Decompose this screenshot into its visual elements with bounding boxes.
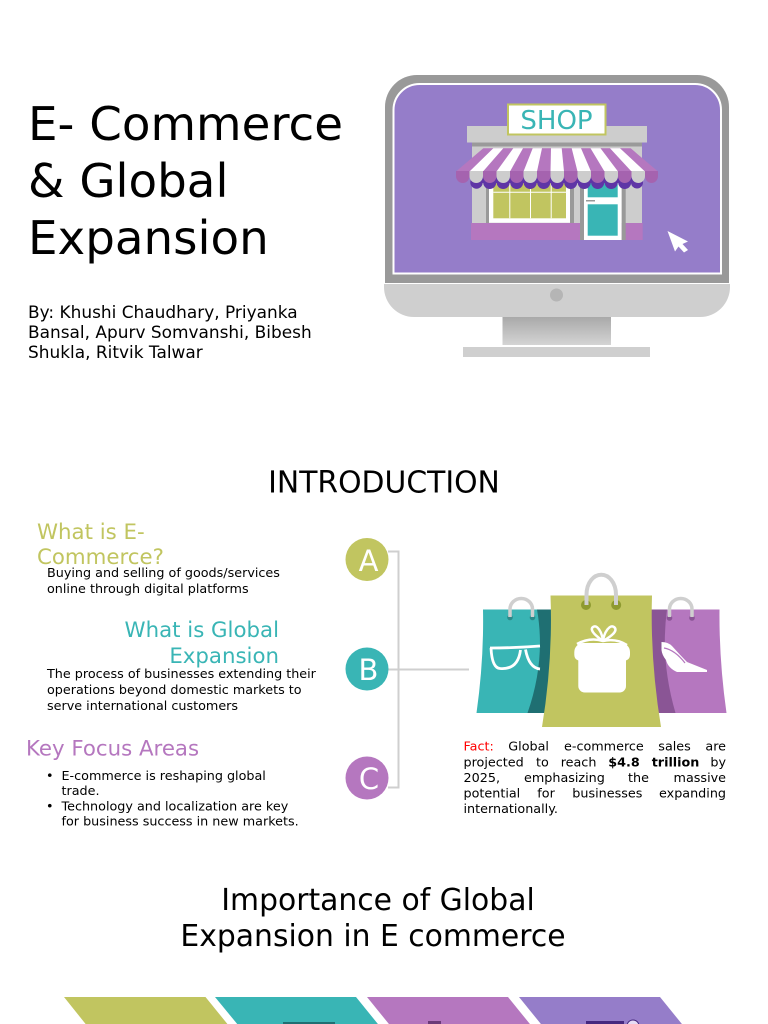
icon: cursor	[668, 231, 688, 252]
icon: shopping bags	[476, 575, 726, 727]
fact callout: massive	[674, 771, 726, 786]
purple bag	[650, 598, 726, 713]
bullet list: E-commerce is reshaping global	[62, 769, 266, 784]
body text	[46, 667, 317, 714]
subheading: What is E-	[37, 520, 145, 545]
badge A	[346, 538, 388, 581]
monitor stand	[502, 317, 611, 345]
screen	[394, 84, 721, 274]
green bag	[542, 575, 661, 727]
fact callout: businesses	[572, 786, 643, 802]
block: key focus areas	[26, 736, 299, 830]
fact callout: to	[536, 756, 549, 770]
bullet list: •	[46, 800, 54, 814]
subheading: What is Global	[125, 618, 279, 643]
subheading: Expansion	[169, 644, 279, 669]
fact callout	[464, 740, 726, 817]
fact callout: e-commerce	[564, 740, 644, 754]
body text: online through digital platforms	[47, 582, 249, 597]
bullet list: for business success in new markets.	[62, 815, 299, 830]
connector bracket	[388, 552, 469, 788]
title	[28, 98, 343, 266]
subheading: Commerce?	[37, 545, 164, 570]
awning	[456, 148, 658, 189]
shop roof	[467, 126, 647, 142]
fact callout: sales	[658, 740, 691, 754]
fact callout: Fact:	[464, 740, 494, 754]
teal bag	[476, 598, 552, 713]
bullet list	[46, 769, 299, 830]
monitor button	[550, 288, 563, 302]
fact callout: $4.8	[608, 756, 640, 770]
subheading: Key Focus Areas	[26, 736, 199, 762]
body text: operations beyond domestic markets to	[47, 683, 302, 698]
subheading	[125, 618, 279, 669]
title: Expansion	[28, 212, 269, 266]
chevron violet	[519, 997, 696, 1024]
fact callout: trillion	[652, 756, 699, 770]
fact callout: the	[628, 771, 649, 786]
monitor chin	[384, 284, 730, 317]
subheading	[37, 520, 164, 570]
body text	[47, 566, 280, 597]
shop sign: SHOP	[520, 106, 593, 136]
bullet list: •	[46, 769, 54, 784]
title: & Global	[28, 155, 228, 209]
fact callout: by	[710, 756, 726, 770]
chevron green	[64, 997, 242, 1024]
shop door	[580, 180, 626, 240]
body text: serve international customers	[47, 699, 238, 714]
fact callout: are	[705, 740, 726, 754]
heading: importance: Expansion in E commerce	[180, 919, 566, 954]
authors: By: Khushi Chaudhary, Priyanka	[28, 302, 298, 322]
fact callout: projected	[464, 756, 524, 770]
title: E- Commerce	[28, 98, 343, 152]
badge A: A	[359, 544, 379, 578]
bullet list: trade.	[62, 784, 100, 799]
monitor frame	[385, 75, 729, 283]
bullet list: Technology and localization are key	[60, 800, 289, 814]
heading: introduction: INTRODUCTION	[268, 466, 500, 500]
chevron teal	[215, 997, 392, 1024]
gift icon	[574, 626, 630, 692]
block: what is global expansion	[46, 618, 317, 714]
chevron magenta	[367, 997, 544, 1024]
authors: Bansal, Apurv Somvanshi, Bibesh	[28, 322, 312, 342]
heading: importance	[180, 883, 566, 954]
badge B	[346, 648, 388, 690]
fact callout: expanding	[659, 786, 726, 802]
fact callout: potential	[464, 786, 520, 802]
heading: importance: Importance of Global	[221, 883, 535, 918]
fact callout: for	[537, 786, 556, 802]
block: what is e-commerce	[37, 520, 280, 597]
fact callout: Global	[508, 740, 549, 754]
body text: Buying and selling of goods/services	[47, 566, 280, 581]
body text: The process of businesses extending their	[46, 667, 317, 682]
shop walls	[472, 143, 642, 223]
chevron band	[64, 997, 696, 1024]
icon: monitor with shop	[384, 75, 730, 357]
authors	[28, 302, 312, 362]
fact callout: reach	[561, 756, 596, 770]
badge C	[346, 756, 388, 800]
fact callout: internationally.	[464, 802, 558, 817]
fact callout: emphasizing	[524, 771, 605, 786]
badge B: B	[359, 653, 378, 687]
shop base	[471, 223, 643, 240]
authors: Shukla, Ritvik Talwar	[28, 342, 203, 362]
badge C: C	[359, 762, 379, 796]
fact callout: 2025,	[464, 771, 500, 786]
monitor base	[463, 347, 650, 357]
shop window	[486, 180, 574, 223]
